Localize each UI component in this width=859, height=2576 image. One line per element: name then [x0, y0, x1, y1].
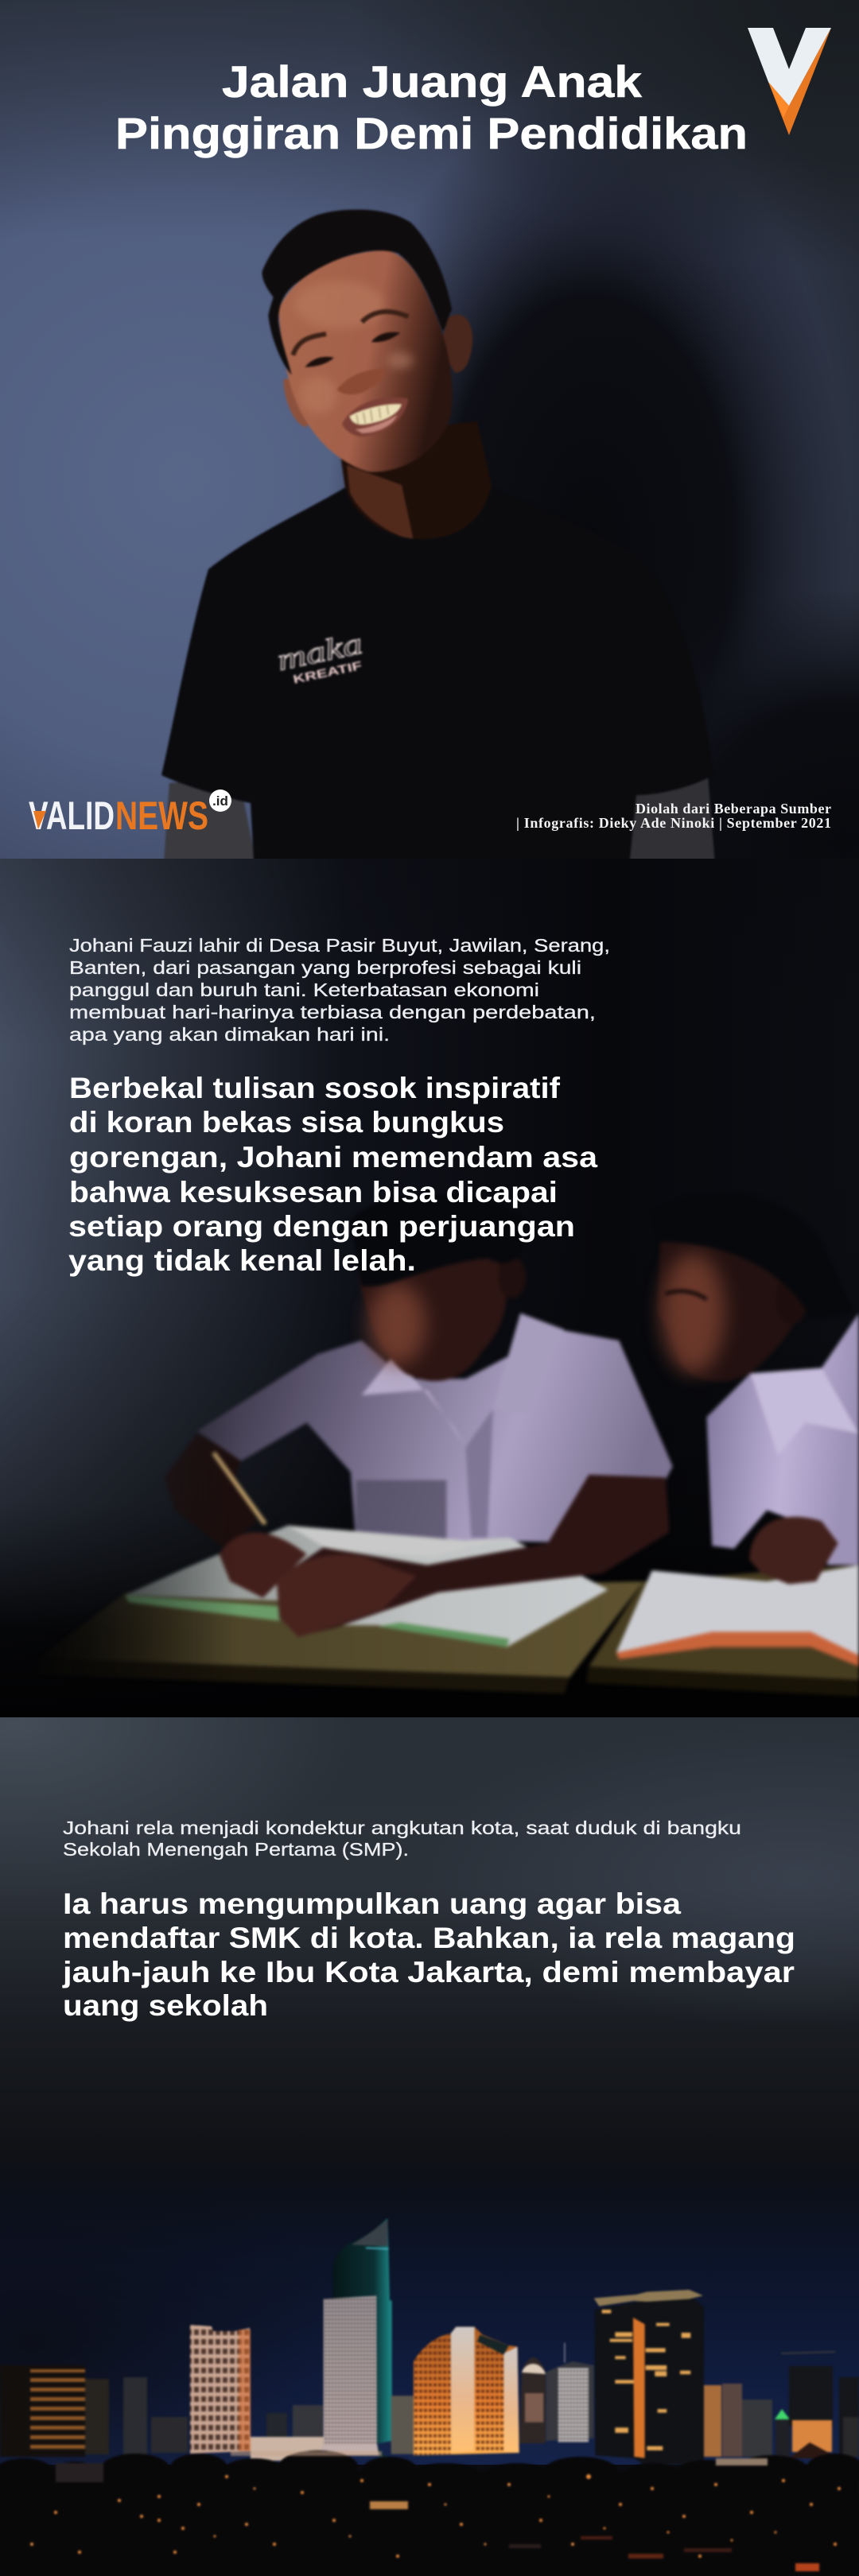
pencil [214, 1453, 265, 1524]
source credit [516, 801, 831, 831]
shirt logo: maka kreatif: KREATIF [292, 659, 363, 687]
small right-of-hotel towers [519, 2343, 594, 2443]
intro paragraph: Johani rela menjadi kondektur angkutan kota, saat duduk di bangku [63, 1818, 741, 1838]
mid small towers [251, 2405, 326, 2461]
intro paragraph: membuat hari-harinya terbiasa dengan perdebatan, [69, 1002, 596, 1022]
ear left [282, 378, 309, 428]
boy 1 face [359, 1253, 507, 1381]
shirt logo: maka kreatif [277, 636, 363, 685]
intro paragraph: Johani Fauzi lahir di Desa Pasir Buyut, Jawilan, Serang, [69, 935, 610, 956]
neck [340, 421, 492, 540]
boy 1 arm front [277, 1475, 670, 1636]
face [278, 250, 453, 472]
panel: childhood study [0, 859, 859, 1717]
photo: smiling young man in black t-shirt [161, 209, 716, 875]
title: Jalan Juang Anak [222, 56, 643, 107]
bold statement: bahwa kesuksesan bisa dicapai [69, 1176, 558, 1208]
mouth [342, 398, 408, 436]
intro paragraph: panggul dan buruh tani. Keterbatasan ekonomi [69, 980, 539, 1000]
city skyline [0, 2218, 859, 2576]
boy 1 shirt [197, 1329, 673, 1543]
black t-shirt [161, 487, 713, 875]
bold statement: jauh-jauh ke Ibu Kota Jakarta, demi membayar [62, 1956, 795, 1988]
desk left [38, 1581, 643, 1678]
dark gradient background [0, 859, 859, 1630]
lit tower left [190, 2325, 251, 2454]
boy 2 ear [775, 1274, 808, 1324]
book right [616, 1565, 859, 1663]
boy 1 arm back [165, 1433, 258, 1549]
head [262, 209, 472, 472]
bold statement: Berbekal tulisan sosok inspiratif [69, 1072, 561, 1104]
boy 2 hair [655, 1193, 854, 1319]
hair [262, 209, 452, 375]
bold statement [68, 1072, 597, 1277]
far left tall block [0, 2365, 188, 2457]
panel: Jakarta city [0, 1550, 859, 2576]
boy 1 ear [499, 1257, 526, 1298]
orange hotel building [391, 2327, 519, 2455]
source credit: | Infografis: Dieky Ade Ninoki | September 2021 [516, 815, 831, 831]
bold statement: yang tidak kenal lelah. [68, 1244, 416, 1277]
boy 1 collar [356, 1313, 564, 1540]
city lights [30, 2474, 841, 2558]
Wisma 46 tower [318, 2218, 394, 2459]
bold statement: di koran bekas sisa bungkus [69, 1106, 504, 1139]
book left [125, 1526, 608, 1647]
bold statement: uang sekolah [63, 1989, 268, 2022]
bold statement: setiap orang dengan perjuangan [68, 1210, 575, 1243]
title [115, 56, 748, 158]
source credit: Diolah dari Beberapa Sumber [636, 801, 831, 817]
photo: two schoolboys studying [38, 1193, 859, 1697]
nose [337, 370, 380, 394]
bold statement: gorengan, Johani memendam asa [69, 1141, 597, 1174]
wall background [0, 0, 859, 859]
ear right [440, 315, 472, 372]
intro paragraph [69, 935, 610, 1045]
boy 1 hair [351, 1194, 524, 1286]
title: Pinggiran Demi Pendidikan [115, 108, 748, 158]
low rooftops [56, 2451, 819, 2571]
eyes [305, 357, 334, 367]
boy 2 shirt [706, 1313, 859, 1565]
desk right [589, 1565, 859, 1680]
intro paragraph [63, 1818, 741, 1860]
bold statement [62, 1887, 795, 2022]
dark twin tower [594, 2290, 704, 2465]
intro paragraph: Sekolah Menengah Pertama (SMP). [63, 1839, 409, 1860]
logo: Validnews.id: VALID [29, 793, 115, 838]
logo: Validnews.id: NEWS [115, 793, 208, 838]
grey undersleeves [163, 778, 716, 859]
boy 1 writing hand [219, 1532, 307, 1598]
dark sky background [0, 1550, 859, 2576]
logo: V mark [748, 28, 831, 135]
forehead highlight [294, 281, 384, 328]
brows [293, 334, 326, 355]
shirt logo: maka kreatif: maka [274, 627, 365, 677]
bold statement: Ia harus mengumpulkan uang agar bisa [63, 1887, 681, 1920]
boy 2 hand [749, 1517, 838, 1585]
intro paragraph: Banten, dari pasangan yang berprofesi sebagai kuli [69, 957, 581, 978]
logo: Validnews.id [29, 789, 231, 838]
panel: portrait hero [0, 0, 859, 859]
bold statement: mendaftar SMK di kota. Bahkan, ia rela magang [63, 1922, 795, 1954]
logo: Validnews.id: .id [212, 793, 228, 809]
boy 2 face [657, 1222, 806, 1382]
right group of towers [704, 2352, 859, 2458]
intro paragraph: apa yang akan dimakan hari ini. [69, 1024, 390, 1045]
ground tree line [0, 2450, 859, 2576]
